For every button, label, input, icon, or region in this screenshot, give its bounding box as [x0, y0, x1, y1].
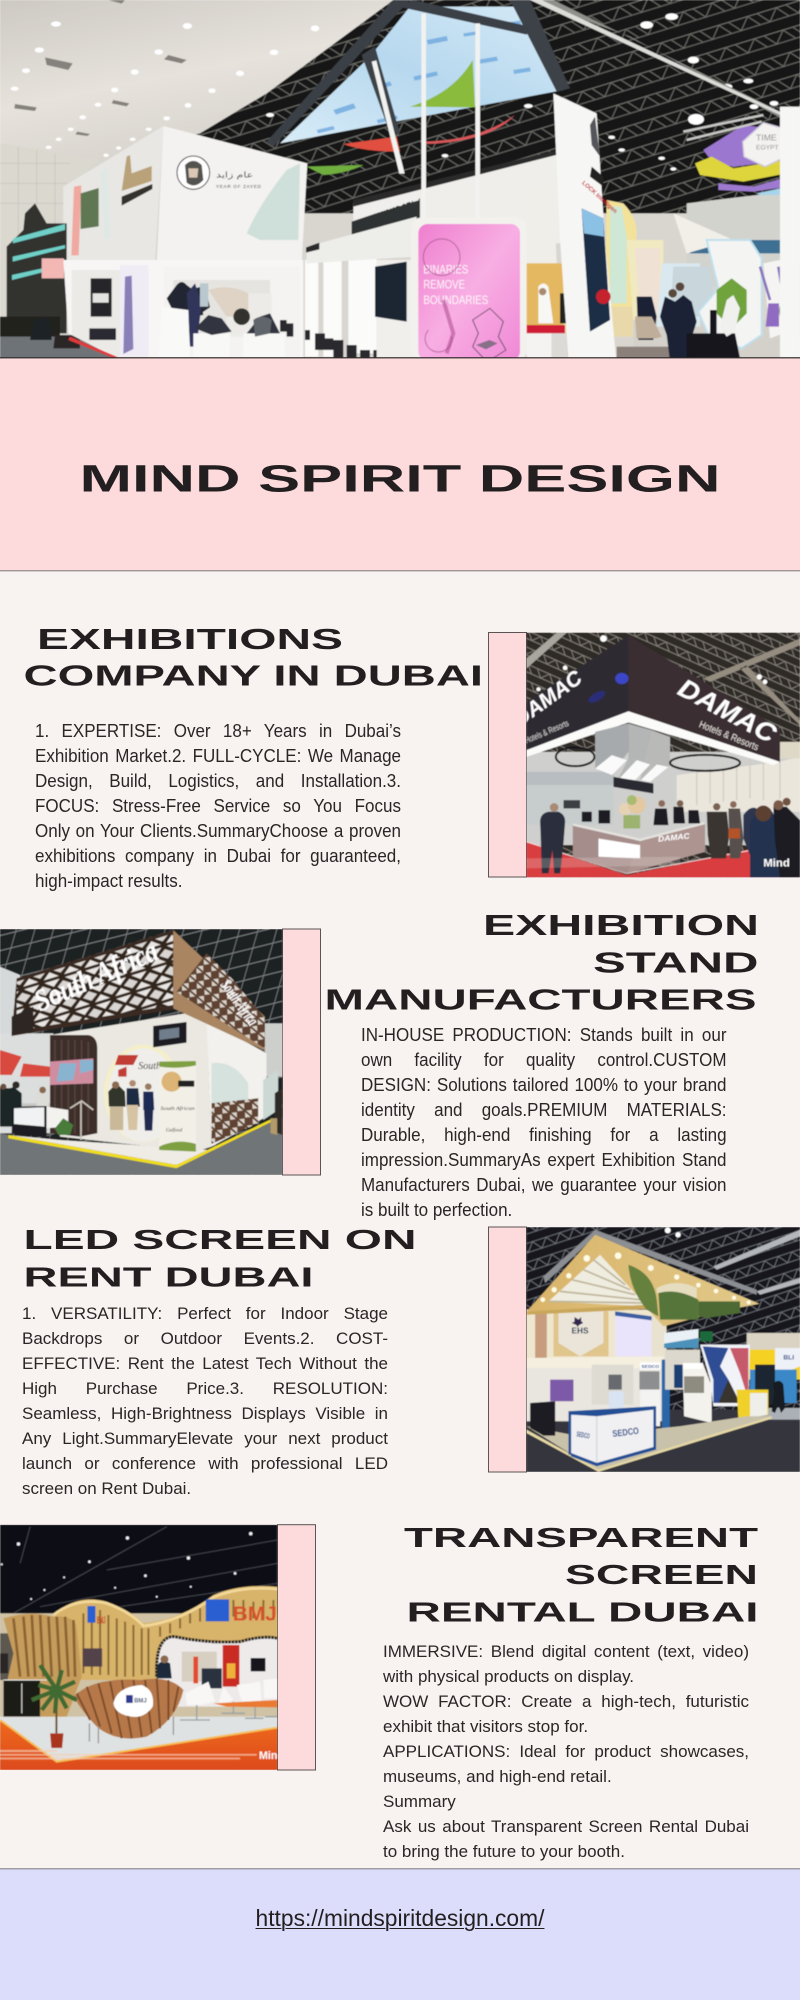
text block: transparent screen rental: with physical products on display.	[383, 1667, 634, 1686]
text block: exhibition stand manufacturers: identity and goals.PREMIUM MATERIALS:	[361, 1100, 727, 1120]
text block: led screen on rent: Seamless, High-Brightness Displays Visible in	[22, 1404, 388, 1423]
heading: transparent screen rental dubai: SCREEN	[565, 1559, 758, 1590]
text block: exhibition stand manufacturers: DESIGN: Solutions tailored 100% to your brand	[361, 1074, 727, 1094]
small print	[0, 1750, 257, 1759]
pink tab: damac	[488, 632, 526, 877]
inner opening	[157, 1637, 277, 1707]
pull-up banner	[159, 1061, 196, 1152]
top fascia left	[12, 930, 173, 1035]
photo: damac stand	[510, 632, 800, 878]
heading: led screen on rent dubai: RENT DUBAI	[24, 1261, 314, 1292]
text: tahaluf: #TahalufUAE	[350, 189, 420, 223]
text block: exhibition stand manufacturers: IN-HOUSE PRODUCTION: Stands built in our	[361, 1024, 727, 1044]
palm plant	[32, 1665, 77, 1713]
text block: exhibition stand manufacturers: impression.SummaryAs expert Exhibition Stand	[361, 1150, 727, 1170]
text block: exhibition stand manufacturers: is built to perfection.	[361, 1200, 512, 1220]
heading: exhibition stand manufacturers: EXHIBITION	[483, 910, 759, 942]
photo: south africa stand: Gulfood	[166, 1129, 183, 1134]
heading: transparent screen rental dubai: TRANSPARENT	[404, 1522, 758, 1553]
text block: transparent screen rental: WOW FACTOR: Create a high-tech, futuristic	[383, 1692, 749, 1711]
photo: damac stand: Hotels & Resorts	[523, 718, 571, 745]
photo: bmj stand	[0, 1524, 284, 1770]
right structures	[664, 1329, 698, 1348]
heading: exhibitions company	[24, 624, 483, 692]
right glass and lattice desk	[212, 1063, 248, 1107]
hex sign and people	[698, 240, 762, 348]
floor	[0, 1117, 282, 1175]
fascia left	[526, 635, 628, 750]
tahaluf sign	[352, 198, 420, 242]
heading: led screen on rent dubai	[24, 1224, 416, 1292]
hero photo: exhibition stand	[0, 0, 800, 358]
white floor	[0, 1717, 277, 1762]
hero photo: exhibition stand: BINARIES	[423, 263, 469, 276]
photo: bmj stand: BMJ	[134, 1699, 147, 1705]
text block: led screen on rent	[22, 1304, 388, 1498]
rule under title band	[0, 570, 800, 571]
text block: transparent screen rental: Summary	[383, 1792, 456, 1811]
footer link: https://mindspiritdesign.com/	[256, 1905, 544, 1931]
left dark building	[7, 203, 67, 333]
photo: damac stand: Mind	[763, 857, 790, 869]
hero bottom rule	[0, 357, 800, 358]
photo: sedco stand: SEDCO	[641, 1364, 659, 1370]
heading: exhibition stand manufacturers	[324, 910, 759, 1017]
pink tab: south africa	[282, 929, 320, 1175]
fascia right	[628, 635, 780, 762]
photo: south africa stand: South African	[161, 1107, 195, 1112]
heading: exhibition stand manufacturers: MANUFACTURERS	[324, 985, 756, 1017]
flowers	[623, 815, 640, 828]
heading: exhibitions company: EXHIBITIONS	[37, 624, 343, 656]
hero photo: exhibition stand: REMOVE	[423, 279, 465, 292]
far hall	[747, 1333, 800, 1363]
hero photo: exhibition stand: LOCK Intelligen	[580, 180, 618, 215]
floor	[526, 1410, 800, 1472]
text block: led screen on rent: 1. VERSATILITY: Perfect for Indoor Stage	[22, 1304, 388, 1323]
text block: led screen on rent: screen on Rent Dubai.	[22, 1479, 191, 1498]
left ribbed wall	[3, 1614, 82, 1717]
text block: transparent screen rental: Ask us about Transparent Screen Rental Dubai	[383, 1817, 749, 1836]
tan wall with man and desk	[527, 183, 557, 263]
glowing triangular roof panel	[280, 7, 563, 143]
text block: exhibitions company: Exhibition Market.2. FULL-CYCLE: We Manage	[34, 746, 400, 766]
man	[157, 1661, 172, 1678]
photo: sedco stand: BLI	[783, 1355, 794, 1362]
text block: led screen on rent: Any Light.SummaryElevate your next product	[22, 1429, 388, 1448]
text block: led screen on rent: launch or conference with professional LED	[22, 1454, 388, 1473]
monitor	[153, 1022, 187, 1047]
text block: exhibitions company: FOCUS: Stress-Free Service so You Focus	[34, 796, 400, 816]
text: year of zayed	[216, 170, 262, 189]
text block: exhibitions company: Only on Your Clients.SummaryChoose a proven	[34, 821, 400, 841]
text block: transparent screen rental: IMMERSIVE: Blend digital content (text, video)	[383, 1642, 749, 1661]
heading: led screen on rent dubai: LED SCREEN ON	[24, 1224, 416, 1255]
left booth upper block	[157, 126, 307, 263]
text block: exhibitions company: high-impact results.	[34, 871, 182, 891]
pink lightbox	[411, 217, 527, 361]
fins and rings	[595, 724, 628, 775]
fascia right	[173, 930, 265, 1051]
hall wall at far right	[687, 190, 800, 287]
text block: led screen on rent: EFFECTIVE: Rent the Latest Tech Without the	[22, 1354, 388, 1373]
text block: exhibitions company: exhibitions company in Dubai for guaranteed,	[34, 846, 400, 866]
red floor	[526, 838, 800, 877]
chairs	[185, 1678, 277, 1705]
platform	[8, 1118, 273, 1165]
right halls	[605, 200, 637, 307]
photo: bmj stand: BMJ	[97, 1615, 105, 1626]
hero photo: exhibition stand: TIME	[756, 133, 777, 143]
heading: transparent screen rental dubai: RENTAL DUBAI	[406, 1596, 758, 1628]
photo: south africa stand	[0, 929, 282, 1175]
photo: sedco stand: SEDCO	[576, 1429, 591, 1441]
text block: transparent screen rental: museums, and high-end retail.	[383, 1767, 612, 1786]
backdrop white wall	[353, 150, 560, 243]
text block: transparent screen rental: APPLICATIONS: Ideal for product showcases,	[383, 1742, 749, 1761]
text: year of zayed: عام زايد	[216, 170, 253, 179]
photo: sedco stand	[526, 1227, 800, 1472]
text block: transparent screen rental	[383, 1642, 749, 1861]
tall white column with poster	[553, 93, 616, 358]
text block: exhibition stand manufacturers: own facility for quality control.CUSTOM	[361, 1050, 727, 1070]
photo: bmj stand: BMJ	[233, 1604, 277, 1626]
main walls	[50, 1010, 212, 1152]
green sail	[410, 60, 475, 107]
reception desk ribbed	[73, 1679, 183, 1739]
arched door	[104, 1045, 183, 1142]
text block: transparent screen rental: exhibit that visitors stop for.	[383, 1717, 588, 1736]
text block: exhibitions company	[34, 721, 400, 891]
platform	[526, 1416, 772, 1471]
blue logo and red letters	[206, 1599, 229, 1621]
pink tab: sedco	[488, 1227, 526, 1472]
text block: exhibitions company: Design, Build, Logistics, and Installation.3.	[34, 771, 400, 791]
text block: led screen on rent: High Purchase Price.3. RESOLUTION:	[22, 1379, 388, 1398]
orange floor	[0, 1720, 277, 1770]
photo: damac stand: DAMAC	[673, 672, 783, 750]
text block: exhibition stand manufacturers: Manufacturers Dubai, we guarantee your vision	[361, 1174, 727, 1194]
panel: pink title band	[0, 358, 800, 571]
heading: exhibition stand manufacturers: STAND	[593, 947, 758, 979]
photo: sedco stand: EHS	[571, 1326, 589, 1336]
text block: exhibition stand manufacturers	[361, 1024, 727, 1220]
canopy body	[53, 1586, 277, 1680]
back wall	[526, 752, 800, 845]
photo: bmj stand: Mind	[259, 1750, 284, 1762]
pink tab: bmj	[278, 1525, 316, 1770]
text block: transparent screen rental: to bring the future to your booth.	[383, 1842, 625, 1861]
heading: transparent screen rental dubai	[404, 1522, 758, 1628]
white arched partitions and black stubs	[305, 257, 377, 357]
panel: footer band	[0, 1868, 800, 2000]
monitor	[375, 262, 407, 322]
photo: south africa stand: South	[138, 1061, 161, 1072]
canopy	[527, 1235, 759, 1326]
photo: sedco stand: SEDCO	[612, 1426, 639, 1439]
lower booth	[63, 260, 303, 358]
reception desk	[573, 824, 705, 873]
people	[540, 807, 800, 877]
greenery	[628, 1265, 658, 1316]
photo: damac stand: DAMAC	[658, 831, 690, 844]
title: MIND SPIRIT DESIGN	[80, 458, 720, 500]
sedco counter	[530, 1401, 555, 1436]
left people, desk and plant	[0, 1087, 22, 1127]
booth body	[526, 1310, 666, 1363]
photo: damac stand: DAMAC	[510, 666, 587, 731]
text: year of zayed: YEAR OF ZAYED	[216, 184, 262, 189]
roof beam	[530, 0, 792, 119]
heading: exhibitions company: COMPANY IN DUBAI	[24, 660, 483, 692]
hanging purple yellow sign	[703, 125, 793, 167]
orange strip	[213, 1700, 277, 1707]
hero photo: exhibition stand: BOUNDARIES	[423, 294, 489, 307]
text block: exhibitions company: 1. EXPERTISE: Over 18+ Years in Dubai’s	[34, 721, 400, 741]
white poles	[372, 13, 480, 220]
photo: damac stand: Hotels & Resorts	[697, 719, 760, 753]
text block: exhibition stand manufacturers: Durable, high-end finishing for a lasting	[361, 1124, 727, 1144]
hall	[0, 1613, 277, 1723]
text block: led screen on rent: Backdrops or Outdoor Events.2. COST-	[22, 1329, 388, 1348]
hero photo: exhibition stand: EGYPT	[756, 144, 779, 151]
